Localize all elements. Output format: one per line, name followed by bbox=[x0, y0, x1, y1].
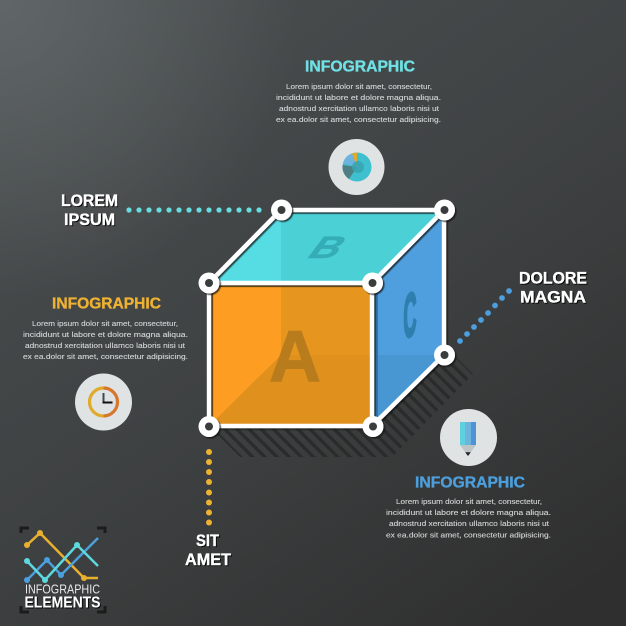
heading: left: INFOGRAPHIC bbox=[52, 296, 161, 312]
panel: top info block bbox=[276, 58, 441, 124]
icon: pencil bbox=[440, 409, 497, 466]
text block: bottom right bbox=[386, 497, 551, 540]
heading: bottom right: INFOGRAPHIC bbox=[415, 474, 525, 492]
text block: top: incididunt ut labore et dolore magna aliqua. bbox=[276, 93, 441, 102]
heading: top: INFOGRAPHIC bbox=[305, 58, 415, 76]
letter A: A bbox=[269, 317, 321, 397]
text block: bottom right: Lorem ipsum dolor sit amet, consectetur, bbox=[396, 497, 542, 506]
cube bbox=[198, 200, 455, 437]
text block: left bbox=[23, 319, 188, 361]
label: lorem ipsum: IPSUM bbox=[64, 210, 115, 229]
label: sit amet: SIT bbox=[196, 531, 220, 550]
label: sit amet bbox=[185, 531, 232, 569]
corner nodes bbox=[198, 200, 455, 437]
label: lorem ipsum bbox=[61, 191, 118, 229]
text block: left: ex ea.dolor sit amet, consectetur adipisicing. bbox=[23, 352, 188, 361]
cyan dotted connector bbox=[126, 207, 262, 213]
text block: top bbox=[276, 82, 441, 124]
face: front A bbox=[209, 283, 372, 426]
icon: pie chart bbox=[328, 139, 384, 195]
yellow dotted connector bbox=[206, 449, 212, 526]
blue dotted connector bbox=[457, 288, 512, 344]
label: dolore magna bbox=[519, 268, 587, 306]
text block: bottom right: adnostrud xercitation ullamco laboris nisi ut bbox=[389, 519, 550, 528]
text block: top: Lorem ipsum dolor sit amet, consectetur, bbox=[286, 82, 432, 91]
text block: left: incididunt ut labore et dolore magna aliqua. bbox=[23, 330, 188, 339]
cube hatched shadow bbox=[209, 345, 473, 457]
logo: infographic elements: ELEMENTS bbox=[24, 594, 101, 612]
text block: bottom right: incididunt ut labore et dolore magna aliqua. bbox=[386, 508, 551, 517]
text block: bottom right: ex ea.dolor sit amet, consectetur adipisicing. bbox=[386, 530, 551, 540]
letter C: C bbox=[403, 277, 417, 353]
panel: left info block bbox=[23, 296, 188, 361]
label: sit amet: AMET bbox=[185, 550, 232, 569]
text block: top: ex ea.dolor sit amet, consectetur adipisicing. bbox=[276, 115, 441, 124]
label: dolore magna: MAGNA bbox=[520, 288, 586, 306]
text block: left: Lorem ipsum dolor sit amet, consectetur, bbox=[32, 319, 178, 328]
logo frame corners bbox=[21, 528, 105, 612]
letter B: B bbox=[300, 231, 355, 265]
face: right C bbox=[372, 210, 444, 426]
cube edges bbox=[209, 210, 444, 426]
logo: infographic elements bbox=[21, 528, 105, 612]
logo text: INFOGRAPHIC bbox=[25, 582, 100, 596]
icon: clock bbox=[75, 374, 132, 430]
logo chart lines bbox=[24, 530, 98, 583]
label: dolore magna: DOLORE bbox=[519, 268, 587, 288]
face: top B bbox=[209, 210, 444, 283]
panel: bottom right info block bbox=[386, 474, 551, 540]
label: lorem ipsum: LOREM bbox=[61, 191, 118, 210]
text block: top: adnostrud xercitation ullamco laboris nisi ut bbox=[279, 104, 440, 113]
text block: left: adnostrud xercitation ullamco laboris nisi ut bbox=[25, 341, 186, 350]
